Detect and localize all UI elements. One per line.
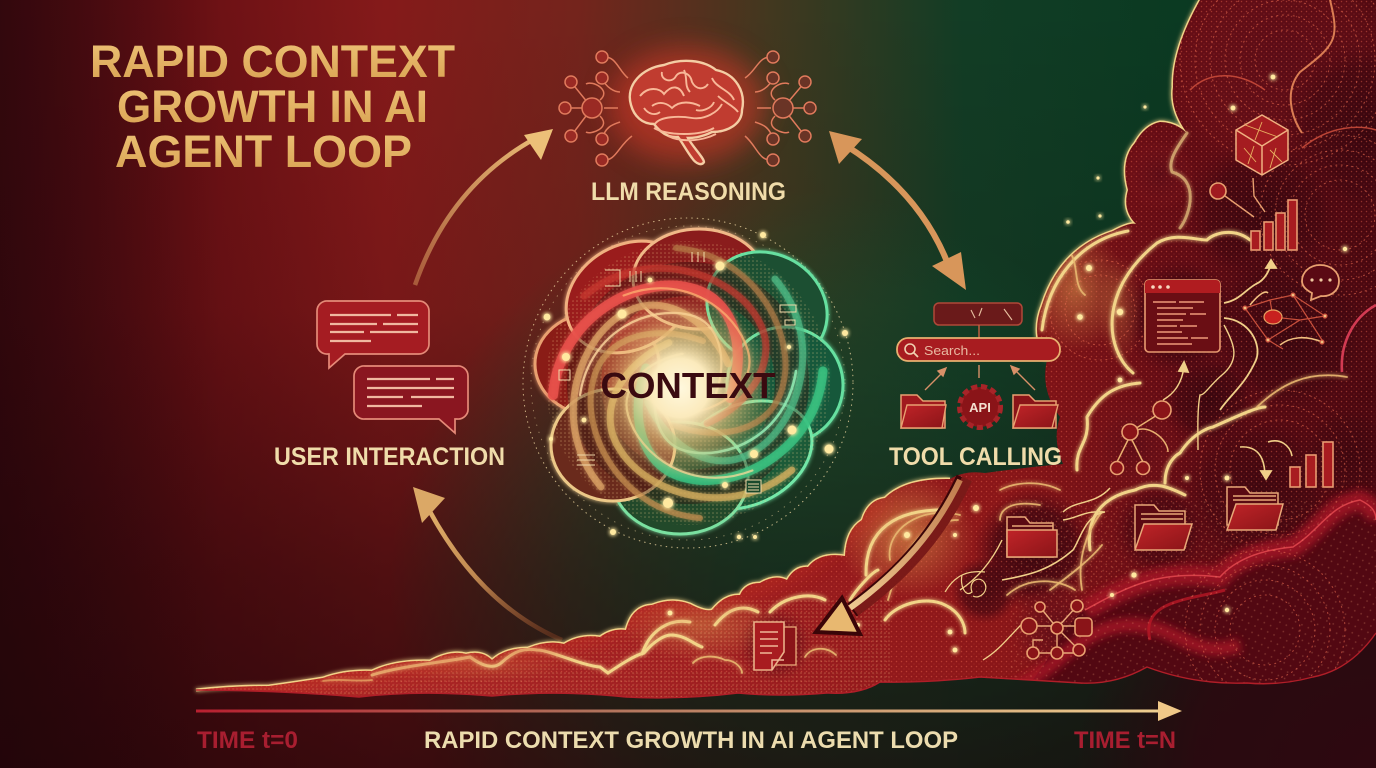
cloud: gold haze on lit left banks <box>390 228 1142 683</box>
icon: search bar: Search... <box>924 343 980 358</box>
user interaction node <box>274 301 505 471</box>
icon: small sketch brain <box>945 572 986 597</box>
icon: pin node and connectors <box>1210 178 1265 217</box>
arrow: LLM reasoning to tool calling, two way <box>829 131 966 290</box>
cloud: lower maroon swell <box>1010 500 1376 710</box>
swirl: outer lobes <box>535 219 848 534</box>
LLM reasoning node <box>559 47 816 206</box>
arrow: user interaction to LLM reasoning <box>415 129 553 285</box>
label: time t=0: TIME t=0 <box>197 727 298 754</box>
icon: folder left of API <box>901 395 946 428</box>
icon: API gear: API <box>969 400 991 415</box>
icon: network cluster upper <box>1243 292 1327 349</box>
network: right of brain <box>745 51 816 166</box>
icon: cube <box>1236 115 1288 175</box>
label: axis caption: RAPID CONTEXT GROWTH IN AI AGENT LOOP <box>424 727 958 754</box>
title: RAPID CONTEXT <box>90 36 455 87</box>
cloud: body clipped to silhouette <box>190 0 1376 710</box>
icon: top toolbar box <box>934 303 1022 338</box>
icon: brain <box>610 47 766 164</box>
cloud: bottom edge stroke <box>196 633 1376 698</box>
icon: chat bubble top <box>317 301 429 368</box>
swirl: glowing sparks <box>544 232 848 539</box>
connector arrows between cloud icons <box>960 260 1292 660</box>
swirl: glowing core <box>588 296 772 480</box>
cloud: dotted ripples upper <box>1050 0 1376 550</box>
icon: folder left <box>1007 517 1057 557</box>
title: AGENT LOOP <box>115 126 412 177</box>
swirl: dot texture <box>546 241 830 525</box>
title: GROWTH IN AI <box>117 81 428 132</box>
icon: API gear <box>960 387 1000 427</box>
swirl: label: CONTEXT <box>600 365 776 406</box>
cloud: darker upper-right lobes <box>1190 0 1376 372</box>
cloud: gold ridges <box>323 133 1347 681</box>
timeline axis arrow <box>196 701 1182 721</box>
label: LLM reasoning: LLM REASONING <box>591 178 786 206</box>
icon: bar chart upper <box>1251 200 1297 250</box>
cloud: gold rim of silhouette <box>196 0 1200 690</box>
central context swirl <box>523 218 853 548</box>
sparkles on cloud <box>668 75 1347 652</box>
label: time t=N: TIME t=N <box>1074 727 1176 754</box>
cloud: rim light inside lower edge <box>196 498 885 690</box>
swirl: spiral bands <box>524 219 852 547</box>
big arrow: tool calling into context cloud <box>816 478 967 634</box>
swirl: data glyphs <box>559 252 796 493</box>
title <box>90 36 455 177</box>
tool calling node <box>889 303 1062 471</box>
cloud: dark cores behind icons <box>737 0 1376 683</box>
icon: speech bubble <box>1302 265 1339 300</box>
arrow: timeline tail back to user interaction <box>413 487 562 640</box>
icon: chat bubble bottom <box>354 366 468 433</box>
icon: network bottom <box>1021 600 1092 659</box>
icon: folder middle <box>1135 505 1192 550</box>
context cloud growth <box>190 0 1376 710</box>
icon: folder right <box>1227 487 1283 530</box>
icon: folder right of API <box>1013 395 1058 428</box>
connectors from tools to search bar <box>925 365 1035 390</box>
icon: bar chart lower <box>1290 442 1333 487</box>
swirl: dark inner ring <box>584 279 792 487</box>
icon: code window <box>1145 280 1220 352</box>
icon: network lower-mid <box>1110 401 1171 474</box>
label: tool calling: TOOL CALLING <box>889 443 1062 471</box>
icon: document stack <box>754 622 796 670</box>
network: left of brain <box>559 51 632 166</box>
swirl: dotted orbit rings <box>523 218 853 548</box>
cloud: overall dots <box>190 0 1376 700</box>
label: user interaction: USER INTERACTION <box>274 443 505 471</box>
icon: search bar <box>897 338 1060 361</box>
